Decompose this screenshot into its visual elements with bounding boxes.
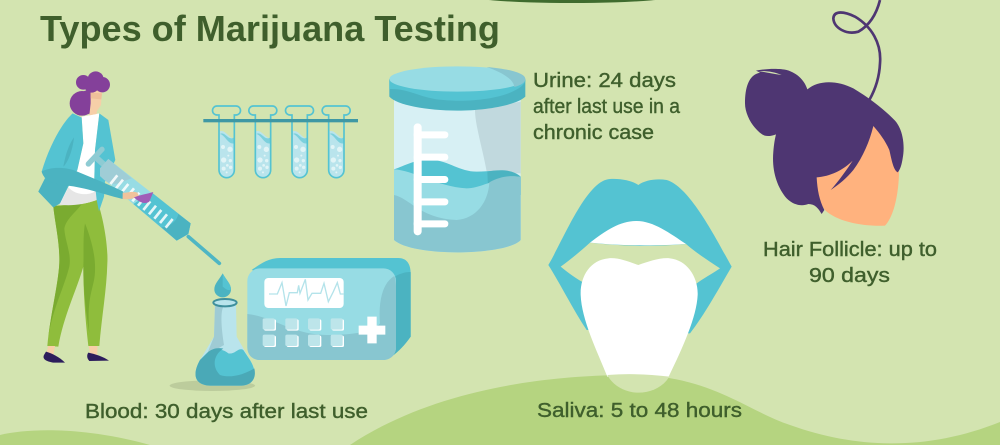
lips bbox=[548, 179, 732, 333]
flask and drop bbox=[170, 273, 255, 391]
monitor machine bbox=[247, 258, 411, 360]
jar body bbox=[394, 95, 521, 252]
urine label: chronic case bbox=[533, 122, 654, 144]
plunger bbox=[88, 149, 110, 170]
hand bbox=[123, 192, 153, 203]
machine front bbox=[247, 268, 396, 360]
blood label: Blood: 30 days after last use bbox=[85, 401, 368, 423]
mouth and tongue bbox=[548, 179, 732, 393]
saliva label: Saliva: 5 to 48 hours bbox=[537, 400, 742, 422]
head and hair bbox=[70, 71, 110, 116]
hair bbox=[745, 69, 904, 214]
hair label bbox=[763, 239, 937, 287]
arm sleeve bbox=[42, 168, 123, 199]
urine jar bbox=[389, 66, 525, 252]
buttons bbox=[263, 318, 344, 347]
syringe barrel bbox=[100, 159, 191, 241]
hair follicle head bbox=[745, 0, 904, 226]
flask shadow bbox=[170, 380, 255, 391]
screen bbox=[264, 278, 344, 308]
machine casing bbox=[252, 258, 411, 356]
bun highlight bbox=[758, 71, 782, 75]
syringe ticks bbox=[110, 175, 173, 228]
jacket bbox=[38, 113, 115, 211]
flask rim bbox=[213, 299, 237, 306]
hair label: 90 days bbox=[809, 265, 890, 287]
title: Types of Marijuana Testing bbox=[40, 8, 500, 49]
tube bbox=[212, 106, 240, 178]
flask body bbox=[196, 305, 255, 386]
jar lid bbox=[389, 66, 525, 111]
shirt bbox=[59, 113, 99, 205]
rack bar bbox=[203, 119, 358, 122]
face bbox=[817, 125, 899, 226]
test tubes rack bbox=[203, 106, 358, 178]
plus sign bbox=[359, 317, 385, 343]
needle bbox=[188, 237, 219, 263]
jar ruler bbox=[414, 123, 448, 235]
urine label: after last use in a bbox=[533, 96, 681, 118]
legs bbox=[44, 199, 109, 363]
person with syringe bbox=[38, 71, 219, 363]
hair label: Hair Follicle: up to bbox=[763, 239, 937, 261]
tongue bbox=[581, 258, 698, 377]
tube bbox=[322, 106, 350, 178]
urine label: Urine: 24 days bbox=[533, 70, 676, 92]
background hills bbox=[0, 375, 1000, 445]
machine side bbox=[392, 272, 411, 356]
drop bbox=[214, 273, 231, 297]
tube bbox=[249, 106, 277, 178]
tube bbox=[285, 106, 313, 178]
urine label bbox=[533, 70, 681, 144]
teeth bbox=[590, 221, 686, 245]
tongue tip bbox=[607, 374, 669, 393]
hair strand bbox=[833, 0, 880, 100]
mouth opening bbox=[561, 243, 720, 283]
top dark green shape bbox=[460, 0, 684, 3]
